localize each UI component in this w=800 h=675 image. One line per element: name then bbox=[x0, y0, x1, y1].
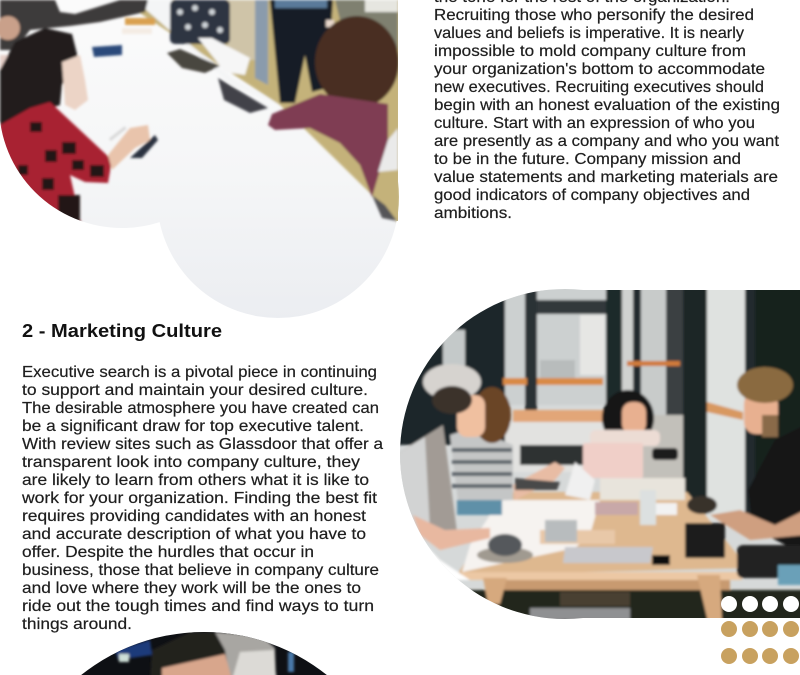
text block: executive recruiting paragraph: new executives. Recruiting executives should bbox=[434, 79, 764, 96]
text block: executive recruiting paragraph: values and beliefs is imperative. It is nearly bbox=[434, 25, 744, 42]
text block: executive recruiting paragraph: to be in the future. Company mission and bbox=[434, 151, 741, 168]
text block: marketing culture paragraph bbox=[21, 364, 383, 633]
decorative dot grid bbox=[721, 596, 799, 664]
text block: executive recruiting paragraph: value statements and marketing materials are bbox=[434, 169, 778, 186]
text block: marketing culture paragraph: work for your organization. Finding the best fit bbox=[21, 490, 378, 507]
text block: marketing culture paragraph: The desirable atmosphere you have created can bbox=[22, 400, 379, 417]
text block: executive recruiting paragraph: Recruiting those who personify the desired bbox=[434, 7, 754, 24]
text block: marketing culture paragraph: Executive search is a pivotal piece in continuing bbox=[22, 364, 377, 381]
text block: executive recruiting paragraph: your organization's bottom to accommodate bbox=[434, 61, 765, 78]
text block: marketing culture paragraph: and accurate description of what you have to bbox=[22, 526, 366, 543]
text block: marketing culture paragraph: requires providing candidates with an honest bbox=[22, 508, 367, 525]
text block: marketing culture paragraph: be a significant draw for top executive talent. bbox=[22, 418, 364, 435]
text block: executive recruiting paragraph: are presently as a company and who you want bbox=[434, 133, 780, 150]
photo: colleagues working at a wooden table bbox=[395, 285, 800, 622]
text block: executive recruiting paragraph: impossible to mold company culture from bbox=[434, 43, 746, 60]
photo: team meeting around a white table bbox=[0, 0, 400, 320]
text block: executive recruiting paragraph: ambitions. bbox=[434, 205, 512, 222]
text block: marketing culture paragraph: offer. Despite the hurdles that occur in bbox=[22, 544, 314, 561]
heading: 2 - Marketing Culture: 2 - Marketing Culture bbox=[22, 320, 222, 341]
text block: marketing culture paragraph: to support and maintain your desired culture. bbox=[22, 382, 368, 399]
photo: man in circular crop bbox=[81, 632, 327, 675]
text block: marketing culture paragraph: ride out the tough times and find ways to turn bbox=[22, 598, 374, 615]
text block: marketing culture paragraph: business, those that believe in company culture bbox=[22, 562, 379, 579]
text block: marketing culture paragraph: transparent look into company culture, they bbox=[22, 454, 360, 471]
text block: marketing culture paragraph: are likely to learn from others what it is like to bbox=[22, 472, 369, 489]
text block: executive recruiting paragraph: culture. Start with an expression of who you bbox=[434, 115, 755, 132]
text block: executive recruiting paragraph: begin with an honest evaluation of the existing bbox=[434, 97, 780, 114]
text block: marketing culture paragraph: and love where they work will be the ones to bbox=[22, 580, 361, 597]
text block: marketing culture paragraph: things around. bbox=[22, 616, 132, 633]
text block: executive recruiting paragraph bbox=[434, 0, 780, 222]
text block: marketing culture paragraph: With review sites such as Glassdoor that offer a bbox=[22, 436, 383, 453]
text block: executive recruiting paragraph: good indicators of company objectives and bbox=[434, 187, 750, 204]
